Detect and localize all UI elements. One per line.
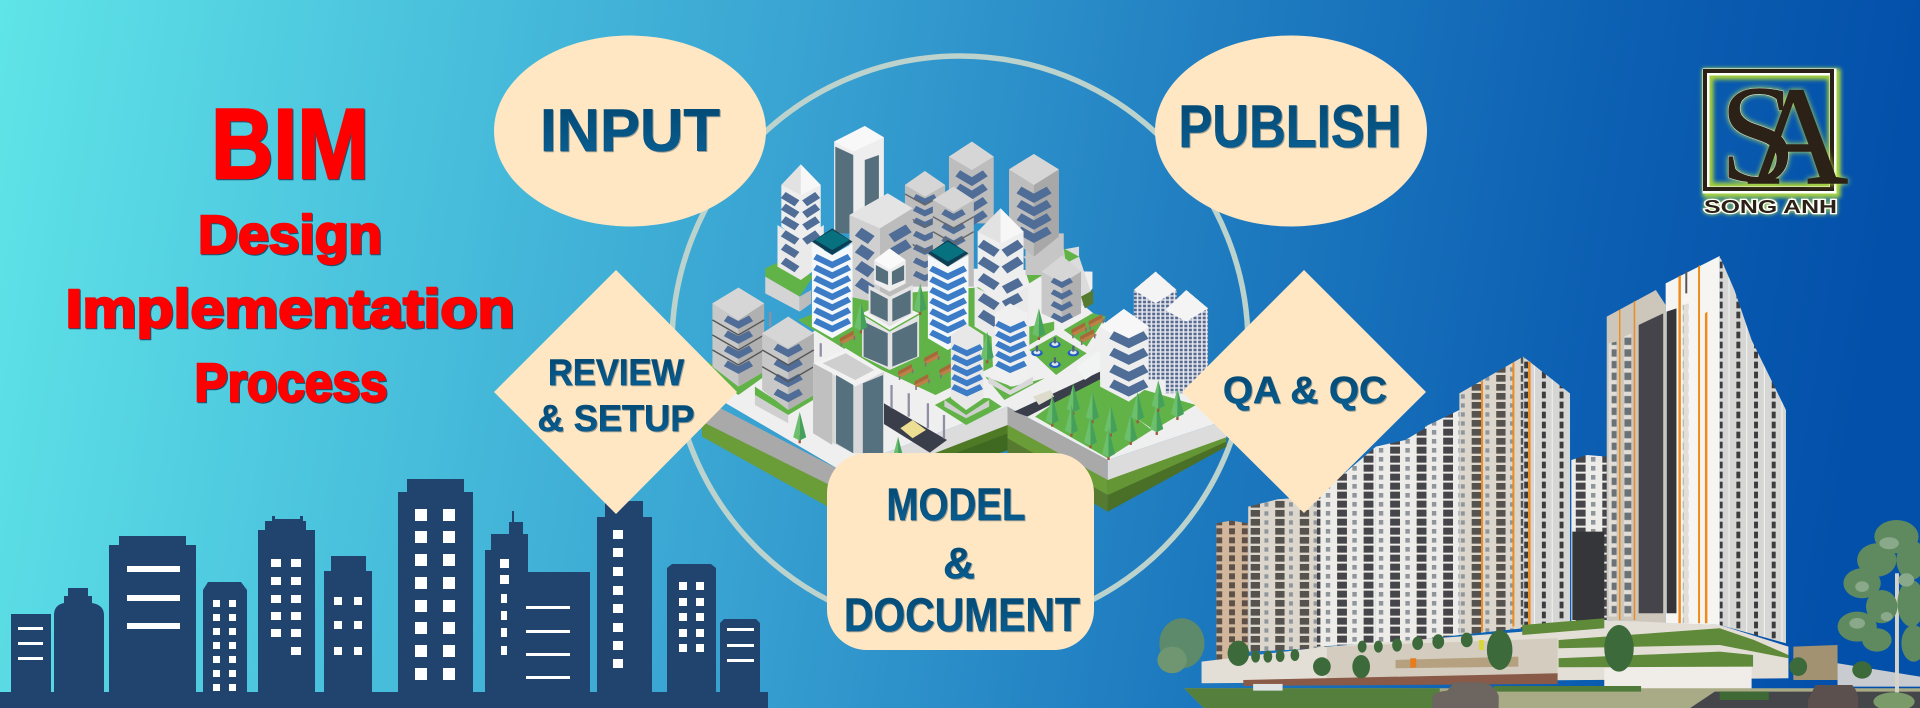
front glass tower	[813, 348, 884, 453]
white pyramid tower	[975, 208, 1028, 340]
central lawn	[798, 287, 993, 395]
gray low block left 1	[708, 288, 764, 395]
logo: Song Anh	[1704, 57, 1848, 217]
left green terrace	[765, 258, 813, 312]
right small gray block	[1042, 256, 1081, 323]
podium and greenery	[1202, 618, 1920, 691]
right white block	[1100, 309, 1149, 402]
title: BIM Design Implementation Process: Process	[194, 353, 388, 413]
rear white tower	[834, 126, 884, 237]
blue tower front left	[944, 324, 989, 418]
rear gray tower	[949, 142, 994, 223]
node: MODEL & DOCUMENT: MODEL	[886, 479, 1026, 530]
long residential block	[1216, 357, 1570, 660]
node: PUBLISH	[1155, 36, 1427, 226]
island platform	[702, 267, 1226, 513]
gray low block left 2	[755, 317, 814, 423]
logo: Song Anh: SONG ANH	[1704, 197, 1837, 217]
fountains	[1031, 337, 1079, 368]
street trees	[1157, 618, 1872, 679]
node: MODEL & DOCUMENT: &	[943, 539, 975, 588]
node: QA & QC: QA & QC	[1223, 370, 1387, 412]
road, hedges and cars	[1184, 682, 1920, 708]
node: MODEL & DOCUMENT: DOCUMENT	[844, 588, 1080, 641]
trees	[793, 283, 1184, 468]
white mass building	[849, 193, 913, 303]
process circle ring	[672, 56, 1248, 632]
title: BIM Design Implementation Process: Design	[198, 205, 382, 265]
side block behind tower	[1571, 455, 1607, 623]
apartment complex photo	[1157, 256, 1920, 708]
logo: Song Anh: A	[1747, 59, 1848, 214]
node: INPUT: INPUT	[540, 97, 720, 164]
blue tower front right	[988, 303, 1033, 395]
node: REVIEW & SETUP: & SETUP	[538, 398, 694, 439]
stepped glass tower	[862, 248, 919, 370]
street lamps	[770, 312, 944, 438]
title: BIM Design Implementation Process: Implementation	[66, 279, 514, 339]
node: REVIEW & SETUP: REVIEW	[548, 352, 684, 393]
right tall white towers	[1134, 272, 1208, 393]
title: BIM Design Implementation Process	[66, 88, 514, 413]
logo: Song Anh: S	[1719, 57, 1797, 212]
road with car	[884, 350, 1100, 453]
title: BIM Design Implementation Process: BIM	[211, 88, 369, 199]
right gray tower	[1009, 154, 1064, 275]
node: PUBLISH: PUBLISH	[1178, 93, 1402, 160]
node: INPUT	[494, 36, 766, 226]
mid gray towers	[905, 171, 974, 287]
left pyramid tower	[777, 164, 824, 280]
teal roof blue tower left	[812, 228, 852, 338]
node: QA & QC	[1182, 270, 1426, 513]
node: MODEL & DOCUMENT	[827, 453, 1094, 650]
main tower	[1607, 256, 1786, 643]
park benches	[840, 314, 1105, 390]
teal roof blue tower right	[928, 240, 968, 350]
isometric city illustration	[702, 126, 1226, 513]
lawn patches	[935, 313, 1196, 458]
city skyline silhouette	[0, 479, 768, 708]
large tree at right	[1838, 520, 1920, 708]
rear green terraces	[1024, 247, 1093, 308]
node: REVIEW & SETUP	[494, 270, 737, 514]
